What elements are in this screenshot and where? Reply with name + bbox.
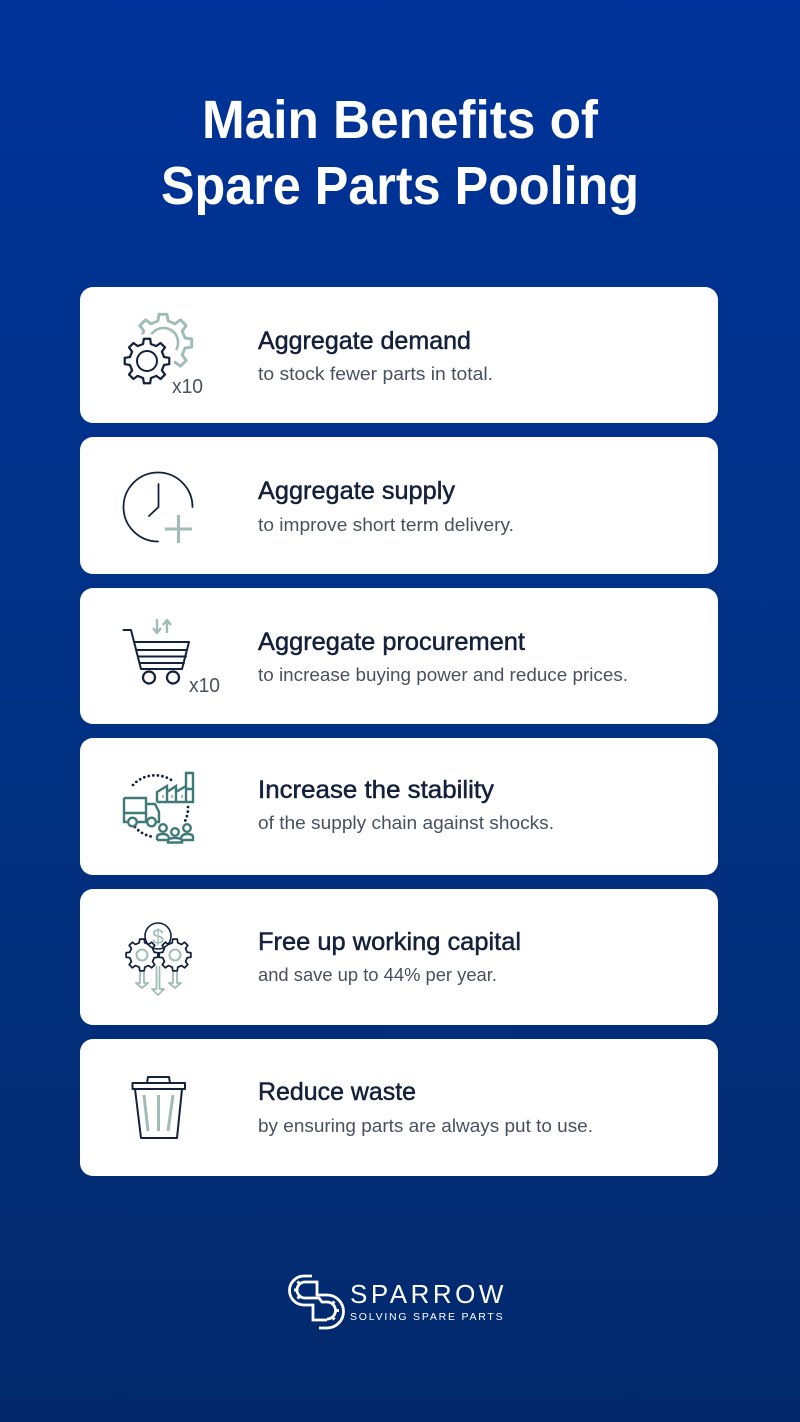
panel: aggregate supply xyxy=(80,437,718,574)
title xyxy=(161,90,639,216)
heading: Aggregate supply xyxy=(258,477,455,505)
icon: trash bin xyxy=(132,1077,185,1138)
heading: Increase the stability xyxy=(258,776,495,804)
icon: gears x10: x10 xyxy=(172,376,203,398)
icon: cart x10: x10 xyxy=(189,675,220,697)
icon: gears x10 xyxy=(120,314,203,398)
panel: aggregate demand xyxy=(80,287,718,423)
heading: Aggregate procurement xyxy=(258,628,525,656)
description: to increase buying power and reduce prices. xyxy=(258,665,628,685)
icon: gears and dollar: $ xyxy=(152,926,164,949)
panel: free up working capital xyxy=(80,889,718,1025)
panel: increase the stability xyxy=(80,738,718,875)
description: to stock fewer parts in total. xyxy=(258,364,493,384)
description: by ensuring parts are always put to use. xyxy=(258,1116,593,1136)
wordmark: SPARROW xyxy=(350,1279,507,1309)
title: Main Benefits of xyxy=(202,90,599,150)
panel: aggregate procurement xyxy=(80,588,718,724)
logo mark xyxy=(290,1276,344,1328)
logo: Sparrow xyxy=(290,1276,507,1328)
description: of the supply chain against shocks. xyxy=(258,813,554,833)
heading: Aggregate demand xyxy=(258,327,471,355)
tagline: SOLVING SPARE PARTS xyxy=(350,1311,504,1323)
panel: reduce waste xyxy=(80,1039,718,1176)
title: Spare Parts Pooling xyxy=(161,156,639,216)
heading: Reduce waste xyxy=(258,1078,416,1106)
heading: Free up working capital xyxy=(258,928,521,956)
icon: cart x10 xyxy=(124,619,220,697)
description: to improve short term delivery. xyxy=(258,515,514,535)
icon: clock plus xyxy=(123,472,192,543)
icon: gears and dollar xyxy=(126,923,191,995)
icon: supply chain xyxy=(124,773,193,842)
description: and save up to 44% per year. xyxy=(258,965,497,985)
